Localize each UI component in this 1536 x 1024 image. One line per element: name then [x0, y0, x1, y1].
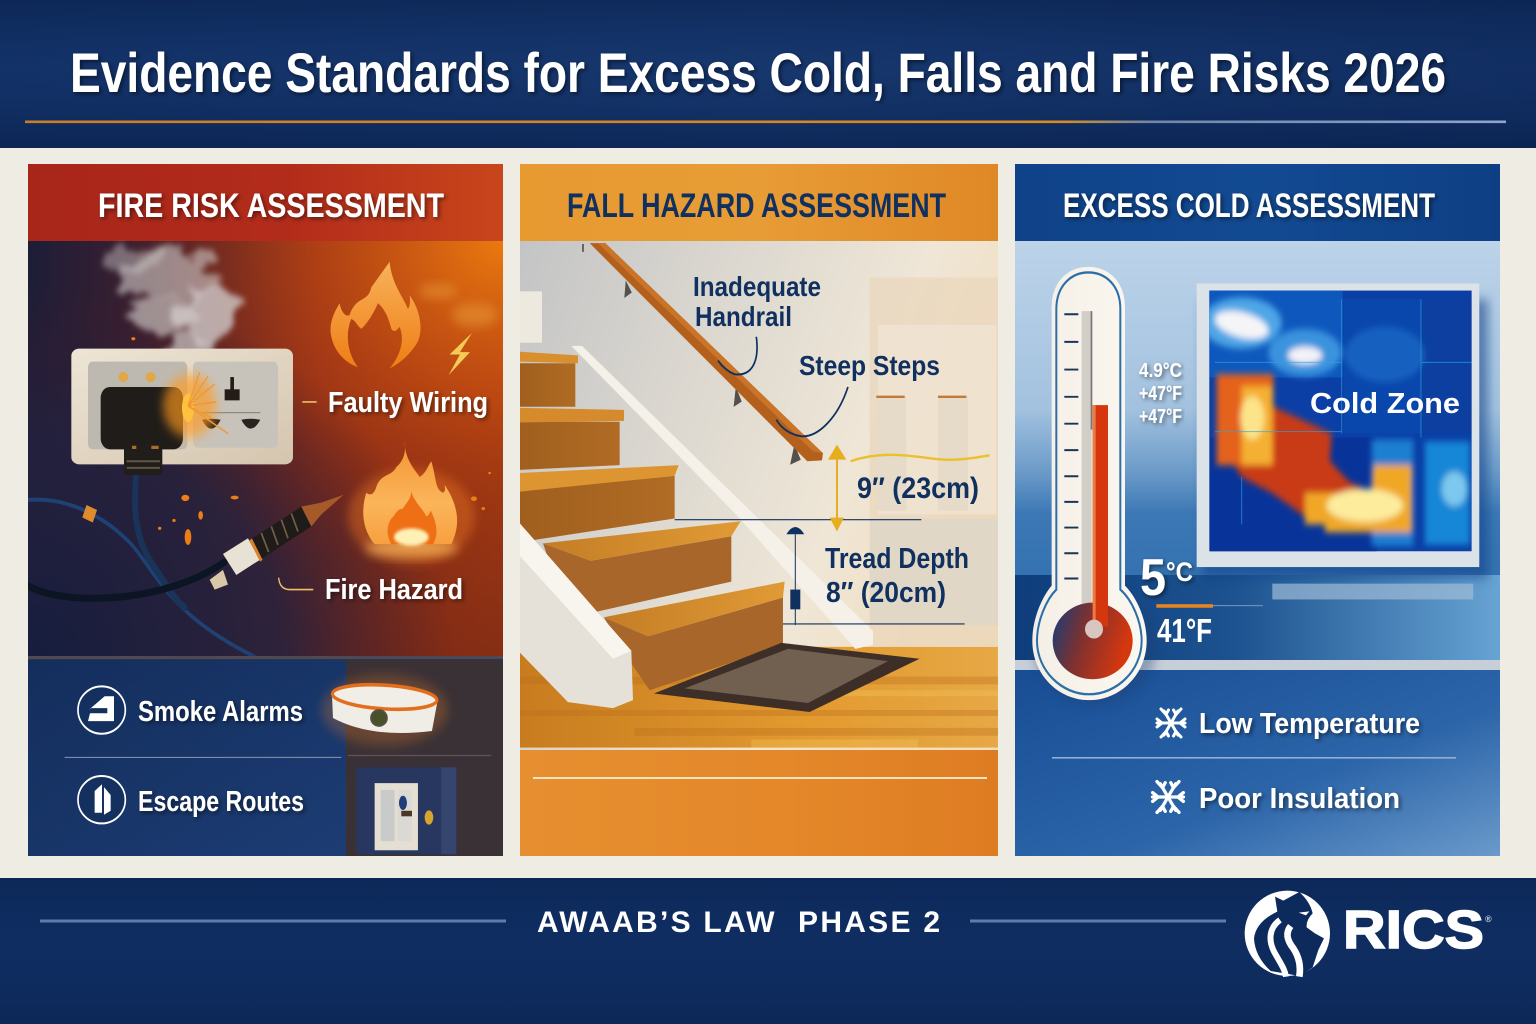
icon: snowflake: [1153, 782, 1183, 812]
unclear temperature readings: +47°F: [1139, 383, 1182, 405]
escape routes label: Escape Routes: [138, 786, 304, 818]
dimension marks: [675, 520, 965, 625]
smoke alarm device: [321, 674, 448, 746]
yellow riser arrow: [828, 445, 990, 532]
poor insulation label: Poor Insulation: [1199, 783, 1400, 815]
cold scene backdrop: [1015, 241, 1500, 856]
unclear temperature readings: 4.9°C: [1139, 360, 1182, 382]
wall socket: [71, 349, 293, 475]
lower safety section: [28, 656, 503, 856]
unclear temperature readings: +47°F: [1139, 406, 1182, 428]
fall panel heading: FALL HAZARD ASSESSMENT: [567, 187, 946, 225]
41 F reading: 41°F: [1157, 612, 1212, 649]
left stringer: [520, 524, 633, 708]
cold panel heading: EXCESS COLD ASSESSMENT: [1063, 187, 1435, 225]
spark: [163, 372, 228, 438]
door area: [870, 278, 998, 647]
icon: escape route badge: [78, 776, 125, 823]
cold zone label: Cold Zone: [1310, 388, 1460, 420]
inadequate handrail label: Handrail: [695, 301, 792, 332]
tread depth label: Tread Depth: [825, 543, 969, 575]
handrail: [583, 243, 823, 463]
icon: flame outline: [331, 262, 421, 368]
thermal heatmap: [1202, 291, 1472, 552]
fire scene illustration: [28, 241, 503, 658]
riser height label: 9″ (23cm): [857, 472, 979, 505]
5 degrees reading: °C: [1166, 557, 1193, 587]
right stringer: [571, 346, 873, 649]
lower orange band: [520, 750, 998, 856]
smoke: [98, 246, 241, 357]
icon: smoke alarm badge: [78, 686, 125, 734]
fall panel heading bar: [520, 164, 998, 241]
low temperature label: Low Temperature: [1199, 708, 1420, 740]
icon: lightning bolt: [449, 333, 472, 375]
footer text: AWAAB’S LAW PHASE 2: [537, 906, 940, 939]
soldering tool: [210, 495, 344, 590]
temperature rule: [1156, 604, 1263, 608]
fire panel heading bar: [28, 164, 503, 241]
fire label: Faulty Wiring: [328, 387, 488, 419]
embers: [131, 337, 491, 545]
registered mark: ®: [1485, 914, 1492, 924]
smoke alarms label: Smoke Alarms: [138, 696, 303, 728]
door mat: [654, 643, 920, 712]
footer band: [0, 878, 1536, 1024]
icon: fire flame: [348, 441, 475, 564]
steps: [520, 352, 785, 690]
5 degrees reading: 5: [1140, 549, 1166, 607]
tread depth label: 8″ (20cm): [826, 577, 946, 609]
cold panel heading bar: [1015, 164, 1500, 241]
logo lion emblem: [1245, 891, 1330, 977]
header band: [0, 0, 1536, 148]
fire panel heading: FIRE RISK ASSESSMENT: [98, 187, 444, 225]
steep steps label: Steep Steps: [799, 350, 940, 381]
panel: fire risk assessment: [28, 164, 503, 856]
annotation curves: [718, 337, 848, 436]
RICS logo: [1245, 891, 1492, 977]
floor: [520, 647, 998, 748]
icon: snowflake: [1157, 709, 1185, 737]
hazard label: Fire Hazard: [325, 574, 463, 606]
thermal image monitor: [1197, 283, 1488, 599]
callout ticks: [279, 402, 317, 590]
panel: excess cold assessment: [1015, 164, 1500, 856]
exit door: [356, 767, 456, 854]
staircase illustration: [520, 241, 998, 751]
newel post top: [520, 291, 542, 343]
inadequate handrail label: Inadequate: [693, 271, 821, 302]
thermometer: [1032, 267, 1157, 706]
panel: fall hazard assessment: [520, 164, 998, 856]
wires: [28, 473, 255, 657]
plug: [101, 387, 183, 449]
logo wordmark: RICS: [1343, 900, 1484, 960]
